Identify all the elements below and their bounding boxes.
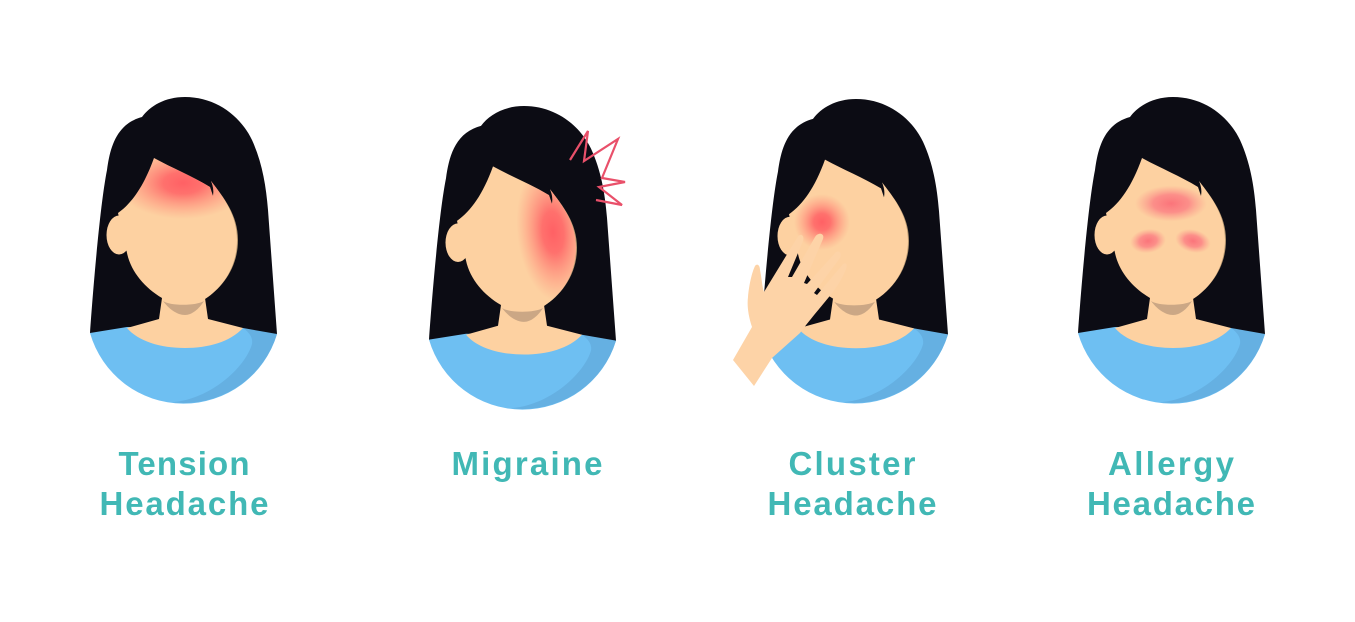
panel: cluster headache (733, 99, 948, 522)
label: Allergy Headache (1087, 445, 1255, 522)
pain area: forehead (132, 158, 228, 216)
pain area: forehead band (1135, 186, 1207, 222)
label: Cluster Headache: Cluster (788, 445, 916, 482)
figure: woman with pain near eye and hand on face (733, 99, 948, 403)
label: Migraine: Migraine (452, 445, 602, 482)
figure: woman with one-sided head pain (429, 106, 625, 410)
panel: migraine (429, 106, 625, 482)
panel: allergy headache (1078, 97, 1265, 522)
panel: tension headache (90, 97, 277, 522)
label: Allergy Headache: Allergy (1108, 445, 1235, 482)
pain area: side of head (520, 184, 576, 296)
label: Tension Headache (100, 445, 268, 522)
figure: woman with sinus pain (1078, 97, 1265, 404)
label: Cluster Headache (768, 445, 936, 522)
label: Tension Headache: Tension (118, 445, 250, 482)
label: Cluster Headache: Headache (768, 485, 936, 522)
icon: hand touching face (733, 234, 847, 386)
figure: woman with forehead pain (90, 97, 277, 404)
label: Tension Headache: Headache (100, 485, 268, 522)
pain area: around eye (794, 194, 850, 250)
pain area: left cheek (1129, 227, 1167, 255)
icon: pain zigzag burst (570, 131, 625, 205)
pain area: right cheek (1173, 225, 1213, 257)
label: Allergy Headache: Headache (1087, 485, 1255, 522)
